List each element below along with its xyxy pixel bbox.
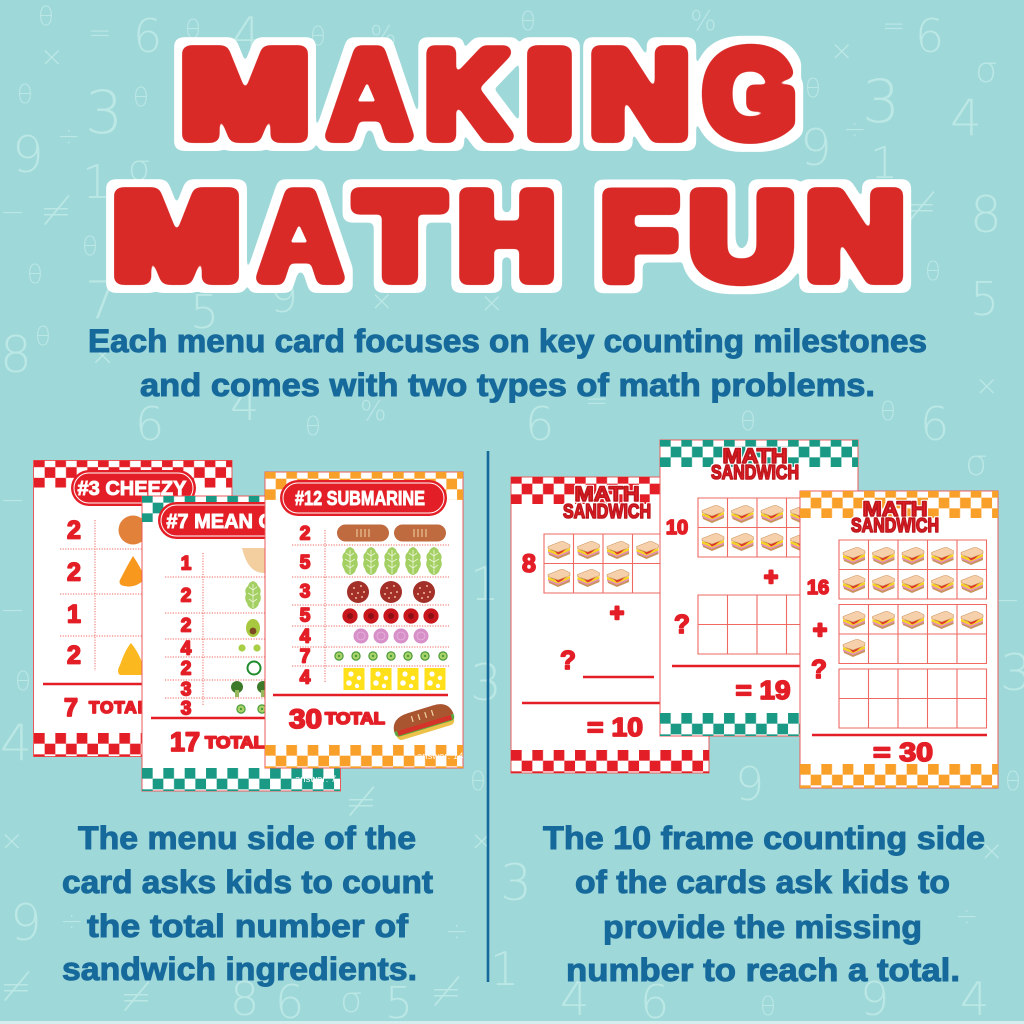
background: teal with handwritten math symbols: θ [17, 80, 33, 110]
text: menu side description: card asks kids to count [62, 864, 433, 900]
logo: Math Sandwich [711, 445, 799, 484]
background: teal with handwritten math symbols: σ [128, 148, 151, 189]
card: 10 frame, 8 + ? = 10: ? [560, 645, 576, 675]
card: #12 Submarine menu: 4 [300, 668, 311, 688]
background: teal with handwritten math symbols: ÷ [843, 112, 866, 145]
title: MAKING MATH FUN: M [181, 26, 309, 162]
background: teal with handwritten math symbols: 1 [870, 138, 898, 189]
background: teal with handwritten math symbols: × [830, 34, 853, 67]
card: #7 Mean Green menu: 4 [181, 638, 192, 660]
background: teal with handwritten math symbols: 7 [85, 271, 118, 331]
background: teal with handwritten math symbols: 1 [490, 942, 519, 996]
background: teal with handwritten math symbols: ≠ [430, 970, 462, 1014]
background: teal with handwritten math symbols: 9 [800, 119, 832, 177]
background: teal with handwritten math symbols: θ [925, 257, 941, 287]
background: teal with handwritten math symbols: 8 [590, 172, 619, 226]
background: teal with handwritten math symbols: × [975, 369, 998, 402]
background: teal with handwritten math symbols: θ [310, 22, 326, 52]
background: teal with handwritten math symbols: θ [740, 407, 756, 437]
card: 10 frame, 8 + ? = 10: + [610, 600, 624, 627]
card: 10 frame, 16 + ? = 30: 16 [807, 577, 829, 599]
background: teal with handwritten math symbols: % [370, 19, 397, 52]
title: MAKING MATH FUN: N [590, 25, 690, 162]
icons: salami [347, 581, 435, 603]
title: MAKING MATH FUN: K [425, 26, 509, 163]
background: teal with handwritten math symbols: 3 [862, 67, 900, 137]
background: teal with handwritten math symbols: × [480, 286, 503, 319]
background: teal with handwritten math symbols: σ [975, 50, 998, 91]
text: 10 frame side description: of the cards ask kids to [575, 864, 950, 900]
card: #12 Submarine menu: TOTAL [325, 709, 385, 728]
card: 10 frame, 10 + ? = 19: ? [674, 609, 690, 639]
card: 10 frame, 10 + ? = 19: = 19 [736, 675, 790, 705]
logo: Math Sandwich: MATH [862, 498, 928, 521]
background: teal with handwritten math symbols: 6 [525, 397, 554, 451]
icons: lettuce [342, 547, 442, 575]
background: teal with handwritten math symbols: 4 [232, 7, 261, 61]
background: teal with handwritten math symbols: θ [880, 397, 896, 427]
title: MAKING MATH FUN: G [704, 26, 796, 162]
background: teal with handwritten math symbols: = [585, 384, 608, 417]
card: #12 Submarine menu: 30 [289, 704, 322, 734]
card: 10 frame, 16 + ? = 30: = 30 [873, 737, 933, 767]
logo: Math Sandwich [851, 498, 939, 537]
card: #12 Submarine menu: 4 [300, 626, 311, 648]
card: #7 Mean Green menu: answer: 7 [295, 774, 336, 785]
title: MAKING MATH FUN: T [357, 168, 443, 304]
card: 10 frame, 8 + ? = 10: = 10 [587, 712, 643, 742]
background: teal with handwritten math symbols: θ [1005, 767, 1021, 797]
icons: bread rolls [337, 524, 446, 542]
subheading [88, 323, 927, 403]
icons: cucumber [334, 651, 448, 661]
background: teal with handwritten math symbols: θ [760, 992, 776, 1022]
background: teal with handwritten math symbols: × [470, 824, 493, 857]
card: 10 frame, 16 + ? = 30: ? [811, 654, 827, 684]
background: teal with handwritten math symbols: 4 [950, 89, 982, 147]
card: #7 Mean Green menu: 2 [181, 586, 191, 606]
card: 10 frame, 8 + ? = 10 [511, 477, 709, 773]
icons: swiss cheese [344, 668, 446, 690]
background: teal with handwritten math symbols: − [0, 195, 25, 230]
logo: Math Sandwich [563, 483, 651, 523]
background: teal with handwritten math symbols: % [360, 394, 387, 427]
subheading: Each menu card focuses on key counting milestones [88, 323, 927, 359]
background: teal with handwritten math symbols: 9 [10, 894, 42, 952]
background: teal with handwritten math symbols: − [0, 593, 25, 628]
background: teal with handwritten math symbols: σ [340, 980, 363, 1021]
card: #3 Cheezy menu: 7 [64, 694, 78, 722]
background: teal with handwritten math symbols: θ [82, 232, 98, 262]
background: teal with handwritten math symbols: θ [305, 412, 321, 442]
title: MAKING MATH FUN: A [260, 167, 342, 304]
card: #7 Mean Green menu: TOTAL [205, 733, 265, 752]
background: teal with handwritten math symbols: 6 [915, 9, 944, 63]
card: #7 Mean Green menu: 2 [181, 658, 191, 680]
text: 10 frame side description: number to reach a total. [566, 952, 960, 988]
text: menu side description [62, 820, 433, 987]
background: teal with handwritten math symbols: θ [470, 767, 486, 797]
logo: Math Sandwich: SANDWICH [851, 515, 939, 537]
title: MAKING MATH FUN [113, 25, 904, 305]
background: teal with handwritten math symbols: − [995, 583, 1020, 618]
background: teal with handwritten math symbols: × [980, 834, 1003, 867]
background: teal with handwritten math symbols: 1 [470, 557, 499, 611]
logo: Math Sandwich: MATH [574, 483, 640, 506]
background: teal with handwritten math symbols: θ [185, 15, 201, 45]
background: teal with handwritten math symbols: 9 [12, 126, 44, 184]
icons: ham [354, 628, 428, 644]
card: #3 Cheezy menu: TOTAL [89, 698, 149, 717]
background: teal with handwritten math symbols: ÷ [60, 904, 83, 937]
background: teal with handwritten math symbols: % [690, 4, 717, 37]
card: #3 Cheezy menu [34, 460, 232, 756]
background: teal with handwritten math symbols: θ [805, 74, 821, 104]
background: teal with handwritten math symbols: ≠ [40, 189, 72, 233]
card: #12 Submarine menu [265, 472, 463, 768]
background: teal with handwritten math symbols: 9 [735, 757, 764, 811]
text: 10 frame side description: The 10 frame counting side [543, 820, 985, 856]
card: #12 Submarine menu: 2 [300, 524, 310, 544]
card: #12 Submarine menu: answer: 14 [417, 751, 463, 762]
background: teal with handwritten math symbols: ≠ [120, 975, 152, 1019]
background: teal with handwritten math symbols: ÷ [955, 899, 978, 932]
logo: Math Sandwich: SANDWICH [711, 462, 799, 484]
background: teal with handwritten math symbols: θ [35, 322, 51, 352]
card: #7 Mean Green menu: 3 [181, 698, 191, 720]
background: teal with handwritten math symbols: × [40, 40, 63, 73]
background: teal with handwritten math symbols: ≠ [0, 965, 32, 1009]
card: #7 Mean Green menu: #7 MEAN GREEN [166, 511, 330, 533]
background: teal with handwritten math symbols: 8 [970, 186, 1002, 244]
title: MAKING MATH FUN: M [113, 169, 240, 304]
background: teal with handwritten math symbols: 6 [135, 397, 164, 451]
card: 10 frame, 10 + ? = 19 [660, 440, 858, 736]
card: #7 Mean Green menu [142, 496, 358, 791]
card: #12 Submarine menu: 5 [300, 606, 311, 626]
background: teal with handwritten math symbols: σ [965, 443, 988, 484]
title: MAKING MATH FUN: F [601, 168, 678, 305]
title: MAKING MATH FUN: H [458, 169, 555, 305]
card: #7 Mean Green menu: 3 [181, 680, 191, 700]
card: #3 Cheezy menu: #3 CHEEZY [78, 478, 187, 500]
card: 10 frame, 8 + ? = 10: 8 [522, 550, 536, 578]
background: teal with handwritten math symbols: × [0, 824, 23, 857]
card: #7 Mean Green menu: 17 [170, 727, 200, 757]
background: teal with handwritten math symbols: θ [133, 83, 149, 113]
card: #7 Mean Green menu: 2 [181, 616, 191, 636]
icons: tomato [342, 608, 439, 624]
background: teal with handwritten math symbols: = [882, 9, 905, 42]
background: teal with handwritten math symbols: × [90, 338, 115, 373]
background: teal with handwritten math symbols: 3 [85, 78, 123, 148]
title: MAKING MATH FUN: N [806, 169, 904, 304]
background: teal with handwritten math symbols: θ [520, 7, 536, 37]
text: 10 frame side description: provide the missing [603, 909, 922, 945]
card: #12 Submarine menu: 7 [300, 646, 310, 668]
title: MAKING MATH FUN: U [689, 167, 795, 304]
background: teal with handwritten math symbols: θ [27, 260, 43, 290]
logo: Math Sandwich: SANDWICH [563, 501, 651, 523]
subheading: and comes with two types of math problems. [140, 367, 875, 403]
background: teal with handwritten math symbols: 4 [0, 714, 32, 772]
card: #3 Cheezy menu: 2 [67, 516, 81, 544]
card: #3 Cheezy menu: 1 [67, 600, 81, 628]
icon: submarine sandwich [390, 700, 456, 741]
background: teal with handwritten math symbols: 3 [470, 654, 502, 712]
card: #3 Cheezy menu: 2 [67, 558, 81, 586]
background: teal with handwritten math symbols: 6 [920, 397, 949, 451]
background: teal with handwritten math symbols: ≠ [905, 185, 937, 229]
title: MAKING MATH FUN: A [328, 25, 411, 162]
card: #12 Submarine menu: #12 SUBMARINE [295, 488, 425, 510]
background: teal with handwritten math symbols: 8 [0, 326, 32, 384]
text: menu side description: The menu side of the [78, 820, 416, 856]
card: 10 frame, 10 + ? = 19: + [764, 564, 778, 591]
background: teal with handwritten math symbols: 6 [133, 9, 162, 63]
background: teal with handwritten math symbols: ÷ [57, 119, 80, 152]
background: teal with handwritten math symbols: − [0, 483, 25, 518]
background: teal with handwritten math symbols: ÷ [445, 914, 468, 947]
background: teal with handwritten math symbols: θ [38, 2, 54, 32]
background: teal with handwritten math symbols: = [88, 16, 111, 49]
background: teal with handwritten math symbols: θ [15, 667, 31, 697]
background: teal with handwritten math symbols: 5 [190, 285, 219, 339]
logo: Math Sandwich: MATH [722, 445, 788, 468]
card: #7 Mean Green menu: 1 [181, 554, 192, 574]
background: teal with handwritten math symbols: 9 [270, 272, 298, 323]
card: 10 frame, 16 + ? = 30 [800, 491, 998, 788]
title: MAKING MATH FUN: I [525, 25, 574, 162]
card: 10 frame, 10 + ? = 19: 10 [666, 517, 688, 539]
text: menu side description: sandwich ingredients. [62, 951, 417, 987]
text: 10 frame side description [543, 820, 985, 988]
background: teal with handwritten math symbols: 1 [82, 155, 111, 209]
background: teal with handwritten math symbols: ≠ [345, 780, 377, 824]
center divider [487, 451, 489, 982]
card: #12 Submarine menu: 5 [300, 552, 311, 574]
title letter A counters [293, 86, 373, 241]
background: teal with handwritten math symbols: × [370, 284, 393, 317]
text: menu side description: the total number of [87, 908, 408, 944]
background: teal with handwritten math symbols: 5 [970, 272, 999, 326]
card: #3 Cheezy menu: 2 [67, 642, 81, 670]
card: #12 Submarine menu: 3 [300, 582, 310, 602]
background: teal with handwritten math symbols: 4 [230, 377, 259, 431]
card: 10 frame, 16 + ? = 30: + [813, 617, 827, 644]
background: teal with handwritten math symbols: 3 [500, 854, 532, 912]
